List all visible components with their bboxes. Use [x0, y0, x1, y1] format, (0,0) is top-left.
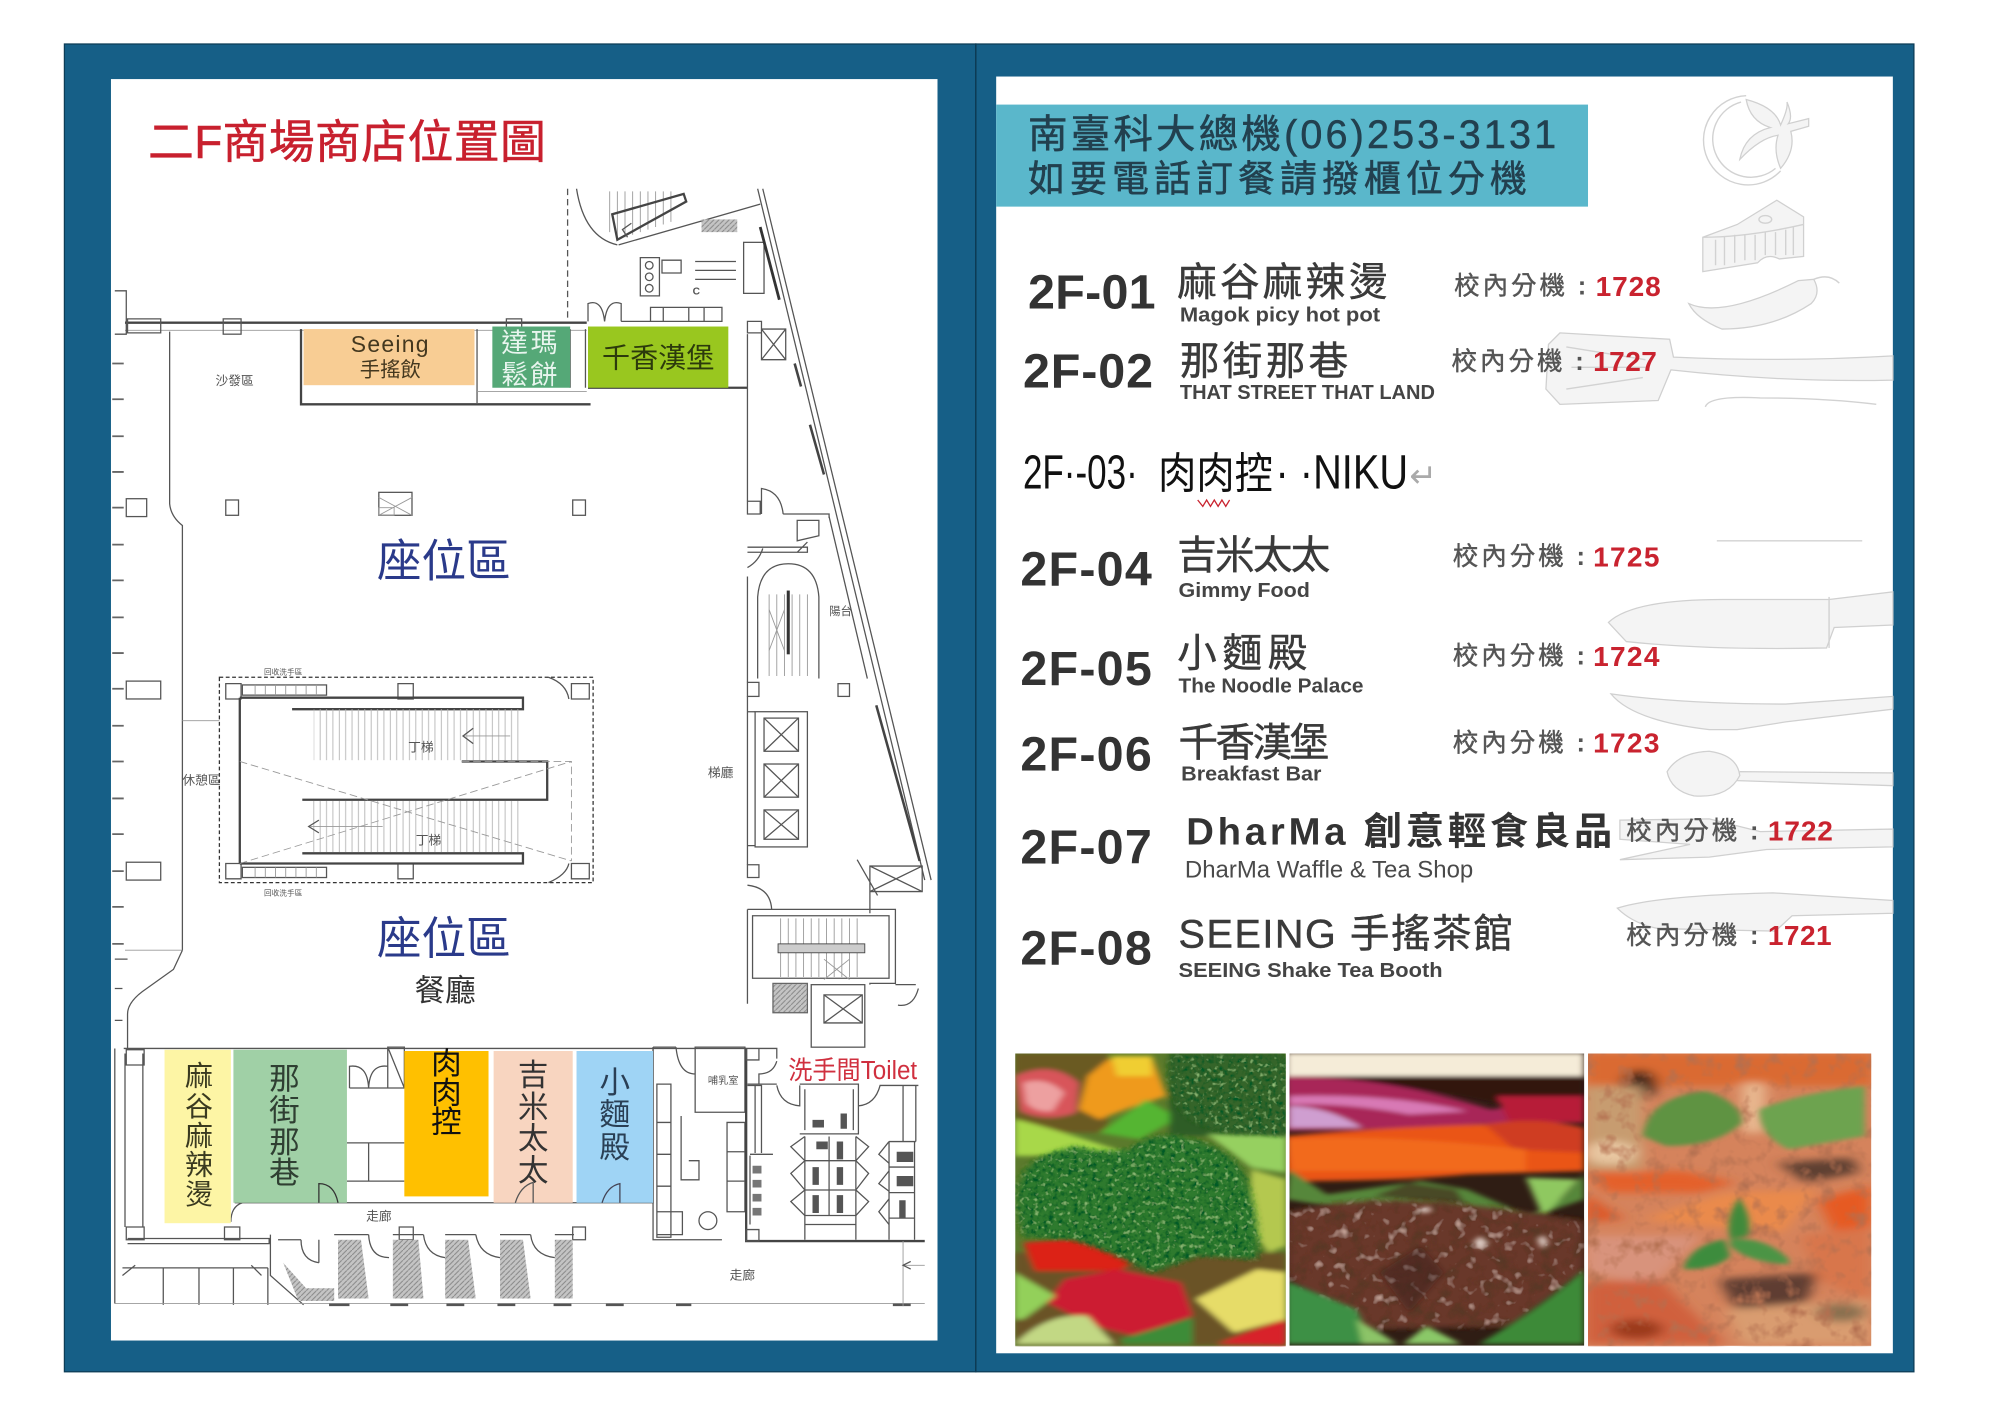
- central atrium stairs: [219, 677, 593, 883]
- label: restaurant: 餐廳: [415, 974, 476, 1008]
- photo: pizza: [1584, 1053, 1873, 1346]
- entry: 2F-03: 肉肉控: [1158, 451, 1273, 499]
- shop: Gimmy Food: 吉: [518, 1058, 548, 1092]
- right stair and lift core: [747, 489, 829, 552]
- entry: 2F-02: THAT STREET THAT LAND: [1180, 382, 1435, 404]
- entry: 2F-07: 2F-07: [1020, 821, 1152, 875]
- entry: 2F-03: 2F·-03·: [1023, 446, 1138, 500]
- title: floor map: 二F商場商店位置圖: [148, 116, 546, 168]
- shop: Seeing: Seeing: [351, 331, 430, 357]
- shop: That Street That Land: 街: [269, 1094, 300, 1128]
- sketch: spatula: [1546, 333, 1893, 407]
- toilets: [746, 1048, 925, 1241]
- columns: [126, 499, 147, 517]
- shop: That Street That Land: [233, 1050, 347, 1203]
- architectural walls: 回收洗手區: [264, 667, 303, 677]
- shop: That Street That Land: 那: [269, 1062, 300, 1096]
- entry: 2F-06: 千香漢堡: [1179, 721, 1329, 765]
- sketch: spoon: [1667, 751, 1893, 796]
- entry: 2F-08: SEEING 手搖茶館: [1179, 913, 1513, 957]
- sketch: small knife: [1617, 893, 1893, 931]
- entry: 2F-08: :: [1750, 922, 1759, 950]
- photo: burger: [1286, 1053, 1584, 1346]
- entry: 2F-02: [1023, 340, 1657, 404]
- photo: vegetables: [1015, 1053, 1286, 1346]
- entry: 2F-01: 1728: [1596, 271, 1661, 302]
- fold line: [975, 43, 977, 1372]
- entry: 2F-05: 1724: [1593, 641, 1660, 672]
- entry: 2F-03: ↵: [1409, 458, 1437, 495]
- shop: NIKU: 肉: [431, 1047, 462, 1081]
- shop: Noodle Palace: [577, 1051, 653, 1203]
- shop: Breakfast Bar: [588, 327, 728, 388]
- architectural walls: [112, 189, 931, 1306]
- entry: 2F-04: Gimmy Food: [1179, 580, 1310, 602]
- entry: 2F-08: [1020, 913, 1832, 982]
- shop: Gimmy Food: [494, 1051, 573, 1203]
- entry: 2F-07: 1722: [1768, 816, 1833, 847]
- entry: 2F-07: [1020, 810, 1833, 884]
- kitchenette and nursing room: [653, 1047, 745, 1240]
- shop: Seeing: 手搖飲: [360, 358, 421, 381]
- entry: 2F-07: :: [1750, 817, 1759, 845]
- entry: 2F-02: 那街那巷: [1180, 340, 1348, 384]
- sketches: kitchen illustrations: [1546, 96, 1893, 931]
- entry: 2F-04: 2F-04: [1020, 542, 1152, 596]
- architectural walls: 梯廳: [708, 765, 734, 780]
- perimeter ticks: [112, 364, 124, 944]
- entry: 2F-08: 2F-08: [1020, 921, 1152, 975]
- entry: 2F-02: 2F-02: [1023, 345, 1153, 399]
- panel: directory: [996, 77, 1893, 1353]
- shop: Gimmy Food: 太: [518, 1154, 548, 1188]
- entry: 2F-05: :: [1577, 643, 1585, 671]
- shop: Dharma: 鬆餅: [501, 360, 560, 390]
- shop: Gimmy Food: 米: [518, 1090, 548, 1124]
- lower corridor rooms: [122, 1227, 585, 1305]
- entry: 2F-05: 小麵殿: [1177, 632, 1307, 676]
- entry: 2F-03: · ·NIKU: [1276, 446, 1408, 500]
- entry: 2F-06: 2F-06: [1020, 727, 1152, 781]
- sketch: chili stem: [1814, 277, 1839, 283]
- shop: Magok hot pot: 麻: [185, 1060, 213, 1091]
- architectural walls: 沙發區: [216, 373, 254, 388]
- entry: 2F-04: :: [1577, 543, 1585, 571]
- panel: floor plan: [111, 79, 938, 1341]
- entry: 2F-06: 校內分機: [1453, 729, 1564, 757]
- sketch: chili: [1689, 279, 1817, 329]
- sketch: cheese: [1703, 200, 1804, 272]
- entry: 2F-01: :: [1578, 273, 1586, 301]
- entry: 2F-05: 校內分機: [1453, 643, 1564, 671]
- shop: Magok hot pot: [165, 1050, 231, 1223]
- entry: 2F-06: 1723: [1593, 728, 1659, 759]
- entry: 2F-03: [1023, 446, 1437, 506]
- shop: Gimmy Food: 太: [518, 1122, 548, 1156]
- banner: phone number: 如要電話訂餐請撥櫃位分機: [1028, 158, 1527, 199]
- shop: Dharma: 達瑪: [501, 328, 560, 358]
- label: seating lower: 座位區: [377, 915, 511, 964]
- banner: phone number: [996, 105, 1588, 207]
- entry: 2F-07: 校內分機: [1626, 817, 1737, 845]
- entry: 2F-01: 校內分機: [1454, 273, 1565, 301]
- architectural walls: C: [693, 287, 701, 298]
- entry: 2F-05: [1020, 632, 1660, 698]
- label: seating upper: 座位區: [377, 538, 511, 587]
- architectural walls: 陽台: [829, 604, 852, 618]
- entry: 2F-07: DharMa Waffle & Tea Shop: [1185, 857, 1473, 884]
- entry: 2F-02: 1727: [1593, 346, 1657, 377]
- entry: 2F-08: 1721: [1768, 920, 1832, 951]
- shop: Dharma: [492, 327, 570, 390]
- sketch: large knife: [1608, 592, 1893, 649]
- shop: NIKU: 控: [431, 1106, 462, 1140]
- line fragment: [1717, 540, 1862, 542]
- entry: 2F-06: :: [1577, 729, 1585, 757]
- shop: Magok hot pot: 谷: [185, 1091, 213, 1122]
- shop: That Street That Land: 巷: [269, 1157, 300, 1191]
- entry: 2F-07: DharMa 創意輕食良品: [1186, 810, 1612, 853]
- shop: Noodle Palace: 殿: [599, 1131, 630, 1165]
- shop: That Street That Land: 那: [269, 1126, 300, 1160]
- outer slanted wall: [758, 189, 931, 880]
- shop: Seeing: [304, 329, 474, 385]
- banner: phone number: 南臺科大總機(06)253-3131: [1028, 113, 1556, 157]
- entry: 2F-04: 校內分機: [1453, 543, 1564, 571]
- architectural walls: 哺乳室: [708, 1074, 738, 1087]
- entry: 2F-08: 校內分機: [1626, 922, 1737, 950]
- entry: 2F-06: Breakfast Bar: [1181, 764, 1321, 786]
- entry: 2F-06: [1020, 721, 1659, 786]
- shop: NIKU: 肉: [431, 1076, 462, 1110]
- label: toilet: 洗手間Toilet: [788, 1057, 917, 1085]
- sketch: butter knife: [1611, 694, 1893, 730]
- shop: Magok hot pot: 辣: [185, 1150, 213, 1181]
- architectural walls: 回收洗手區: [264, 887, 303, 897]
- entry: 2F-05: 2F-05: [1020, 642, 1152, 696]
- entry: 2F-08: SEEING Shake Tea Booth: [1179, 960, 1443, 982]
- entry: 2F-05: The Noodle Palace: [1179, 676, 1364, 698]
- entry: 2F-02: 校內分機: [1452, 348, 1562, 376]
- shop: Noodle Palace: 小: [599, 1066, 630, 1100]
- left lower wall curve: [115, 950, 182, 1048]
- entry: 2F-01: Magok picy hot pot: [1180, 304, 1380, 326]
- shop: Breakfast Bar: 千香漢堡: [602, 342, 714, 373]
- architectural walls: 丁梯: [408, 739, 434, 754]
- shop: Noodle Palace: 麵: [599, 1098, 630, 1132]
- kitchen top: [567, 189, 569, 321]
- shop: Magok hot pot: 麻: [185, 1120, 213, 1151]
- shop: NIKU: [404, 1047, 489, 1196]
- entry: 2F-04: 1725: [1593, 541, 1659, 572]
- architectural walls: 丁梯: [416, 832, 442, 847]
- entry: 2F-01: [1028, 261, 1661, 326]
- shop: Magok hot pot: 燙: [185, 1179, 213, 1210]
- architectural walls: 休憩區: [182, 772, 221, 787]
- architectural walls: 走廊: [366, 1209, 392, 1224]
- architectural walls: 走廊: [730, 1267, 755, 1282]
- entry: 2F-01: 麻谷麻辣燙: [1177, 261, 1388, 305]
- lower shop row: [115, 1048, 746, 1304]
- entry: 2F-02: :: [1575, 348, 1584, 376]
- entry: 2F-04: 吉米太太: [1177, 534, 1330, 578]
- entry: 2F-01: 2F-01: [1028, 266, 1156, 320]
- sketch: fork: [1620, 819, 1893, 860]
- entry: 2F-04: [1020, 534, 1659, 602]
- sketch: tomato: [1704, 96, 1809, 185]
